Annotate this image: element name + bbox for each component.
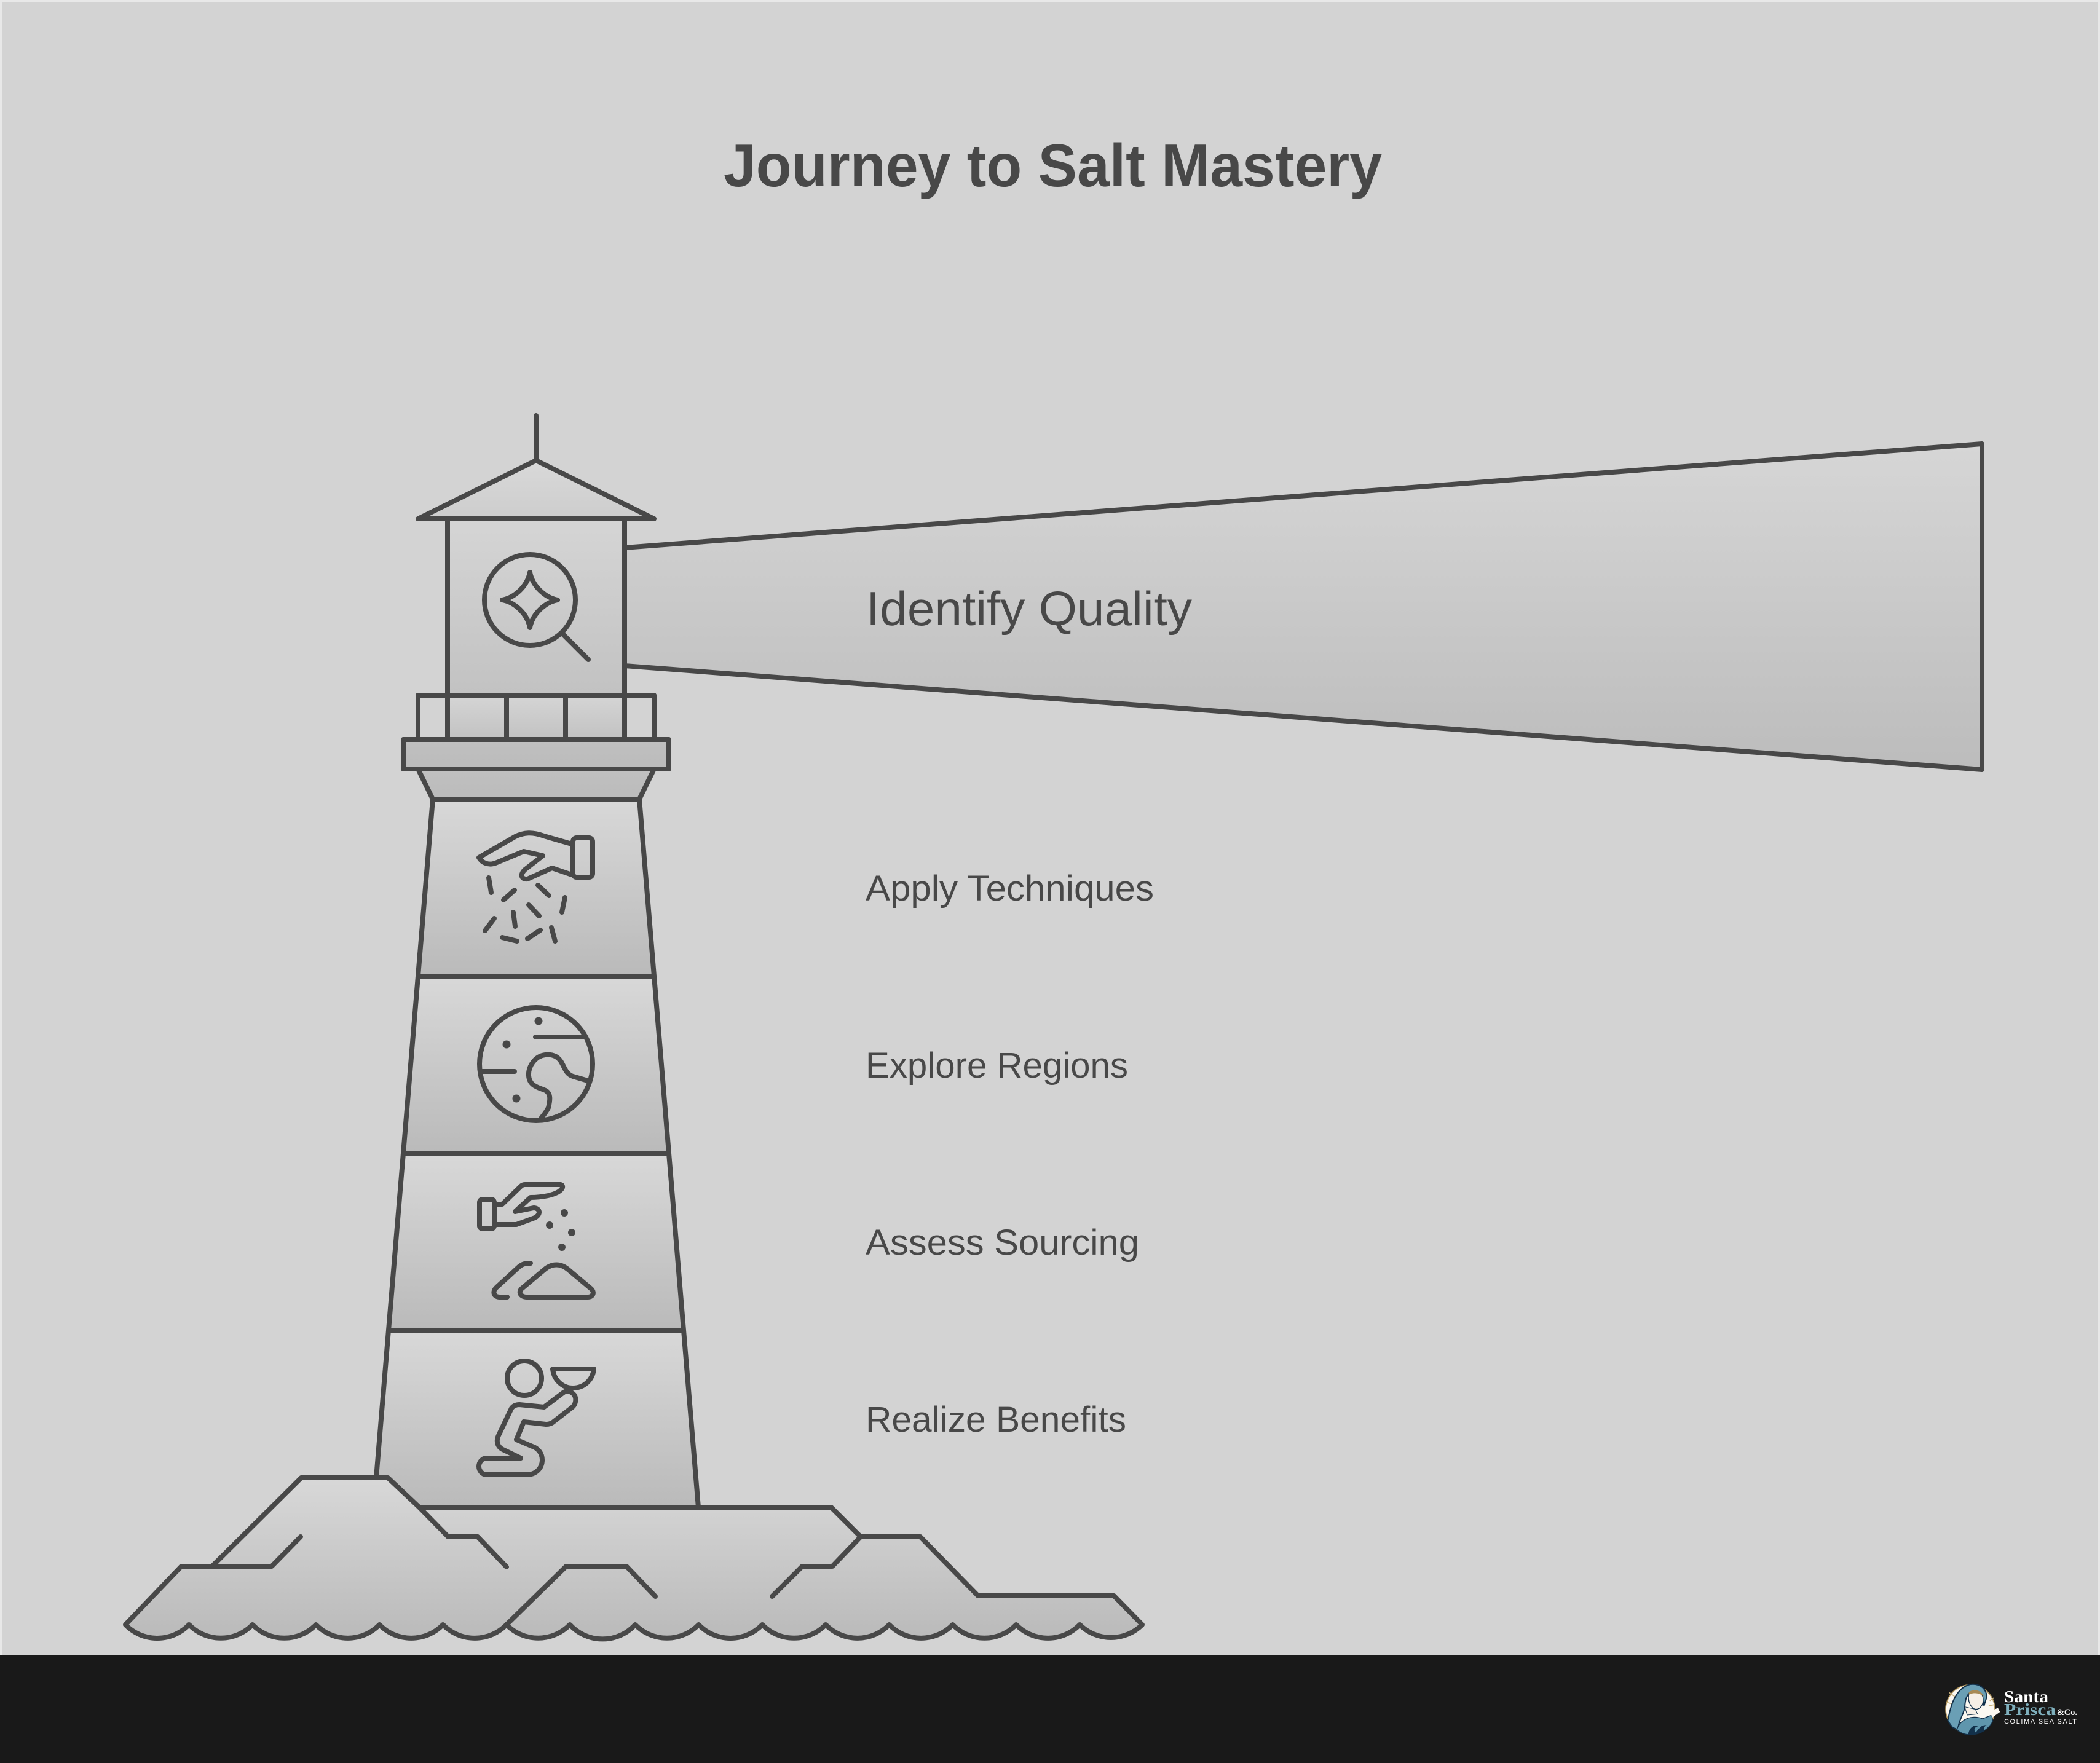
rock crease lines bbox=[212, 1537, 301, 1566]
tower band 3: Assess Sourcing bbox=[389, 1153, 684, 1330]
icon: magnifier with sparkle bbox=[484, 554, 588, 660]
gallery platform bbox=[403, 740, 669, 769]
footer bar bbox=[0, 1655, 2100, 1763]
title: Journey to Salt Mastery bbox=[724, 132, 1382, 199]
label: Apply Techniques: Apply Techniques bbox=[866, 869, 1154, 909]
tower band 4: Realize Benefits bbox=[374, 1330, 698, 1507]
light beam: Identify Quality bbox=[625, 444, 1982, 770]
logo: Santa Prisca & Co.: Prisca bbox=[2004, 1700, 2056, 1719]
logo: Santa Prisca & Co.: &Co. bbox=[2057, 1708, 2077, 1718]
lantern room bbox=[448, 519, 625, 695]
label: Explore Regions: Explore Regions bbox=[866, 1046, 1128, 1086]
label: Realize Benefits: Realize Benefits bbox=[866, 1400, 1126, 1440]
logo wordmark: Santa bbox=[2004, 1687, 2049, 1706]
lighthouse bbox=[374, 416, 698, 1507]
rock silhouette with wave edge bbox=[125, 1478, 1142, 1639]
logo: Santa Prisca & Co. bbox=[1946, 1684, 2077, 1735]
tower band 2: Explore Regions bbox=[403, 976, 669, 1153]
icon: hand sprinkling salt bbox=[479, 833, 593, 941]
balcony railing bbox=[418, 695, 654, 740]
spire bbox=[534, 416, 539, 460]
rocks and waves bbox=[125, 1478, 1142, 1639]
logo: Santa Prisca & Co.: COLIMA SEA SALT bbox=[2004, 1718, 2077, 1726]
tower band 1: Apply Techniques bbox=[418, 799, 654, 976]
icon: hand pouring salt onto mound bbox=[480, 1185, 593, 1297]
logo emblem bbox=[1946, 1684, 2000, 1735]
corbel under platform bbox=[418, 769, 654, 799]
icon: kneeling person offering bowl bbox=[479, 1361, 594, 1475]
label: Assess Sourcing: Assess Sourcing bbox=[866, 1223, 1139, 1263]
label: Identify Quality: Identify Quality bbox=[866, 582, 1192, 636]
roof bbox=[418, 460, 654, 519]
icon: globe bbox=[480, 1008, 593, 1121]
